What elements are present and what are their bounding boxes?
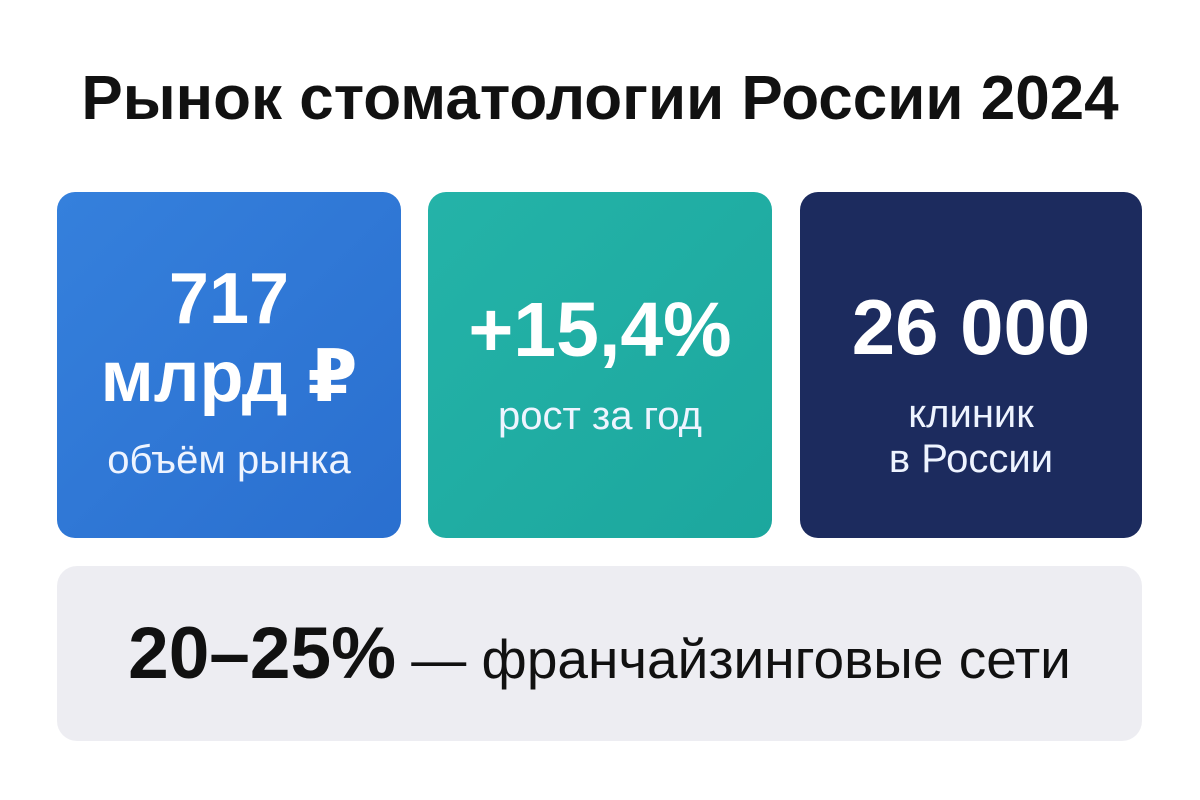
value: 717 млрд ₽: млрд ₽ <box>100 337 358 417</box>
panel: market volume <box>57 192 401 538</box>
panel: franchise share <box>57 566 1142 741</box>
value: 717 млрд ₽: 717 <box>169 259 289 339</box>
label: clinics in Russia <box>889 392 1053 481</box>
title: Рынок стоматологии России 2024 <box>81 64 1119 133</box>
panel: franchise share: 20–25% — франчайзинговые сети <box>128 613 1071 694</box>
value: 717 млрд ₽ <box>100 259 358 417</box>
label: clinics in Russia: клиник <box>908 392 1034 436</box>
label: growth per year: рост за год <box>498 394 702 438</box>
value: 26 000: 26 000 <box>852 283 1090 371</box>
value: +15,4%: +15,4% <box>468 287 732 373</box>
label: clinics in Russia: в России <box>889 437 1053 481</box>
panel: growth <box>428 192 772 538</box>
panel: clinics <box>800 192 1142 538</box>
label: market volume: объём рынка <box>107 438 351 482</box>
